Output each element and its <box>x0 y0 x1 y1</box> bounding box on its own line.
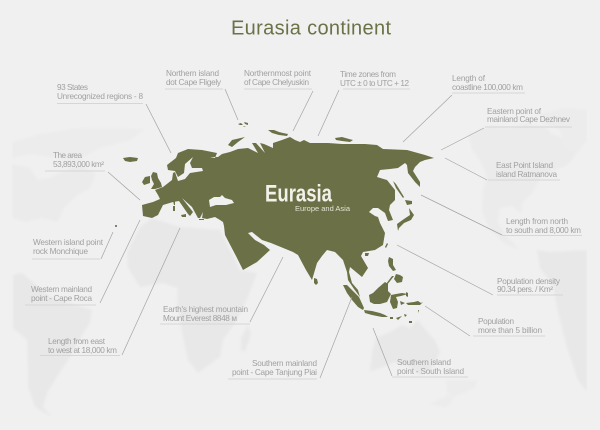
callout: southern mainland: Southern mainland <box>252 359 317 368</box>
island: Severnaya Zemlya <box>268 130 288 136</box>
continent: Greenland (left) <box>12 128 145 162</box>
callout: northernmost point: Northernmost point <box>244 69 312 78</box>
callout: western island <box>32 232 113 259</box>
island: Ireland <box>142 176 150 185</box>
continent: Australia <box>370 320 440 375</box>
callout: north to south: Length from north <box>506 217 568 226</box>
callout: time zones: Time zones from <box>340 70 396 79</box>
callout: time zones <box>318 70 410 136</box>
callout: states <box>57 83 171 153</box>
callout: eastern point <box>441 107 572 150</box>
island: Sakhalin <box>393 181 404 198</box>
island: Hokkaido <box>405 200 412 205</box>
callout: Everest: Mount Everest 8848 м <box>163 314 237 323</box>
island: Taiwan <box>385 243 388 248</box>
callout: population <box>425 306 545 336</box>
callout: coastline <box>403 74 525 142</box>
island: Philippines <box>386 257 403 285</box>
island: Madagascar <box>241 325 251 352</box>
callout: southern island <box>373 328 468 377</box>
island: Great Britain <box>151 172 162 189</box>
callout: east point island: island Ratmanova <box>496 170 557 179</box>
callout: northern island <box>165 69 238 120</box>
callout: area <box>45 151 140 200</box>
island: Sumatra <box>343 285 364 310</box>
callout: western mainland: point - Cape Roca <box>31 294 92 303</box>
continent: North America (left) <box>12 164 96 222</box>
callout: north to south: to south and 8,000 km <box>506 226 581 235</box>
callout: northern island: Northern island <box>166 69 219 78</box>
callout: population: more than 5 billion <box>478 326 542 335</box>
callout: southern island: Southern island <box>397 358 451 367</box>
island: Borneo <box>369 282 391 304</box>
icon: Monchique rock dot <box>115 225 117 227</box>
callout: states: 93 States <box>57 83 88 92</box>
callout: western island: rock Monchique <box>33 247 88 256</box>
island: New Siberian Islands <box>335 137 353 142</box>
island: Hainan <box>365 253 369 256</box>
callout: Everest: Earth's highest mountain <box>163 305 248 314</box>
callout: east point island: East Point Island <box>496 161 553 170</box>
callout: coastline: Length of <box>452 74 486 83</box>
island: Novaya Zemlya <box>228 137 245 147</box>
island: Sardinia and Corsica <box>173 201 175 211</box>
island: Franz Josef Land <box>238 122 248 127</box>
callout: east point island <box>445 158 560 180</box>
continent: Africa <box>127 218 257 373</box>
callout: area: 53,893,000 km² <box>53 160 104 169</box>
island: Iceland <box>123 157 138 162</box>
callout: northern island: dot Cape Fligely <box>166 78 222 87</box>
island: Crete and Cyprus <box>199 215 218 220</box>
callout: time zones: UTC ± 0 to UTC + 12 <box>340 79 409 88</box>
map title: Eurasia: Eurasia <box>265 180 333 208</box>
callout: western mainland <box>25 220 140 305</box>
island: Moluccas and New Guinea <box>406 292 423 323</box>
island: Java and Lesser Sunda <box>364 310 407 320</box>
callout: east to west: Length from east <box>48 337 106 346</box>
callout: states: Unrecognized regions - 8 <box>57 92 143 101</box>
island: Honshu and Kyushu <box>397 208 414 231</box>
island: Sulawesi <box>390 293 408 309</box>
island: Sicily <box>181 214 186 217</box>
world map background <box>12 108 587 417</box>
callout: Everest <box>160 257 283 324</box>
map subtitle: Europe and Asia <box>295 204 351 213</box>
callout: eastern point: mainland Cape Dezhnev <box>487 115 571 124</box>
callout: southern island: point - South Island <box>397 367 464 376</box>
continent: North America (right) <box>468 124 578 250</box>
callout: east to west <box>40 228 180 356</box>
landmass: Eurasia mainland <box>142 137 434 297</box>
callout: northernmost point: of Cape Chelyuskin <box>244 78 309 87</box>
continent: South America (left) <box>13 273 92 417</box>
callout: north to south <box>421 195 582 236</box>
continent: Greenland (right) <box>540 108 587 152</box>
callout: population: Population <box>478 317 514 326</box>
callout: northernmost point <box>244 69 313 131</box>
callout: western mainland: Western mainland <box>31 285 92 294</box>
callout: population density <box>397 245 563 295</box>
callout: southern mainland <box>228 297 352 379</box>
callout: east to west: to west at 18,000 km <box>48 346 117 355</box>
map: Eurasia highlighted <box>115 122 434 323</box>
callout: area: The area <box>53 151 82 160</box>
continent: South America (right) <box>537 250 587 392</box>
callout: population density: 90.34 pers. / Km² <box>497 285 553 294</box>
title: Eurasia continent <box>231 18 391 40</box>
callout: population density: Population density <box>497 277 561 286</box>
island: Sri Lanka <box>314 278 318 285</box>
island: New Zealand <box>430 380 478 408</box>
callout: western island: Western island point <box>33 238 104 247</box>
callout: coastline: coastline 100,000 km <box>452 83 523 92</box>
callout: southern mainland: point - Cape Tanjung Piai <box>232 368 317 377</box>
callout: eastern point: Eastern point of <box>487 107 542 116</box>
